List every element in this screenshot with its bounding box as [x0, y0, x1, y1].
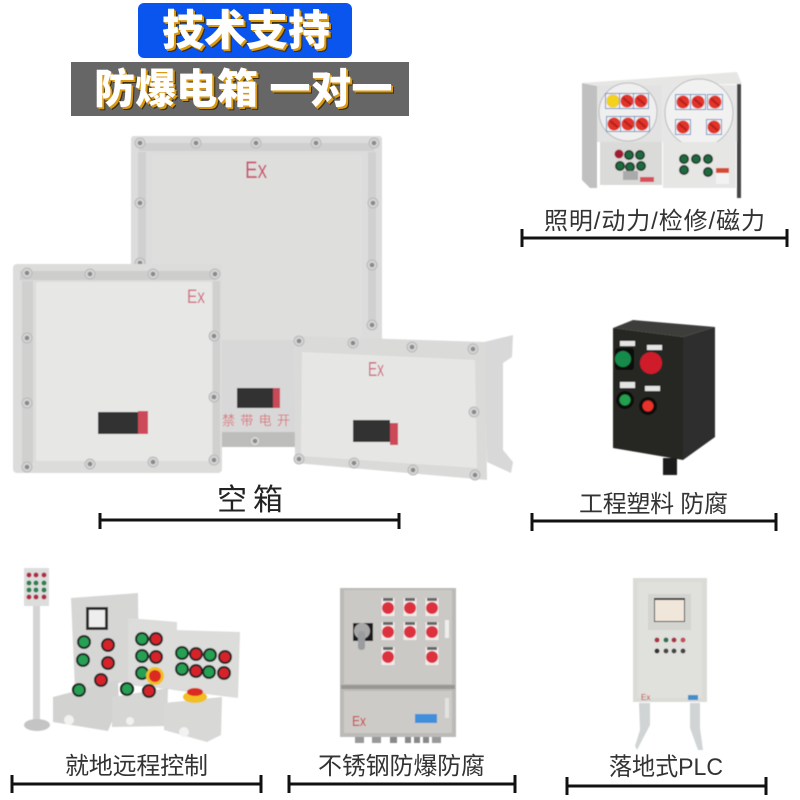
- heading text: explosion-proof box: 防爆电箱 一对一: [94, 66, 392, 112]
- left enclosure: [13, 264, 222, 473]
- caption: floor PLC: 落地式PLC: [609, 753, 723, 781]
- panel: empty enclosures: [13, 136, 513, 480]
- panel: distribution cabinet: [581, 72, 742, 198]
- right enclosure: [294, 335, 513, 480]
- caption: floor PLC: [566, 753, 767, 795]
- panel: floor-standing PLC cabinet: Ex: [641, 693, 650, 702]
- caption: engineering plastic: [531, 491, 777, 531]
- caption: stainless steel: 不锈钢防爆防腐: [318, 753, 485, 780]
- caption: empty box: [99, 484, 400, 529]
- large enclosure: [131, 136, 382, 447]
- large enclosure: 禁带电开: [222, 413, 290, 428]
- caption: cabinet types: 照明/动力/检修/磁力: [544, 208, 765, 235]
- panel: floor-standing PLC cabinet: [633, 578, 707, 750]
- large enclosure: Ex: [245, 157, 267, 184]
- panel: stainless steel cabinet: Ex: [352, 713, 366, 730]
- caption: engineering plastic: 工程塑料 防腐: [579, 491, 728, 518]
- heading text: technical support: 技术支持: [162, 7, 330, 54]
- heading: explosion-proof box one to one: [71, 62, 409, 116]
- panel: black plastic control box: [613, 320, 715, 475]
- panel: local remote control stations: [24, 568, 240, 742]
- caption: local remote control: 就地远程控制: [65, 753, 208, 780]
- caption: stainless steel: [288, 753, 516, 793]
- caption: local remote control: [11, 753, 262, 793]
- caption: cabinet types: [521, 208, 788, 247]
- left enclosure: Ex: [187, 287, 205, 308]
- caption: empty box: 空 箱: [217, 484, 283, 517]
- panel: stainless steel cabinet: [340, 588, 456, 743]
- right enclosure: Ex: [368, 359, 384, 381]
- heading: technical support: [138, 3, 352, 58]
